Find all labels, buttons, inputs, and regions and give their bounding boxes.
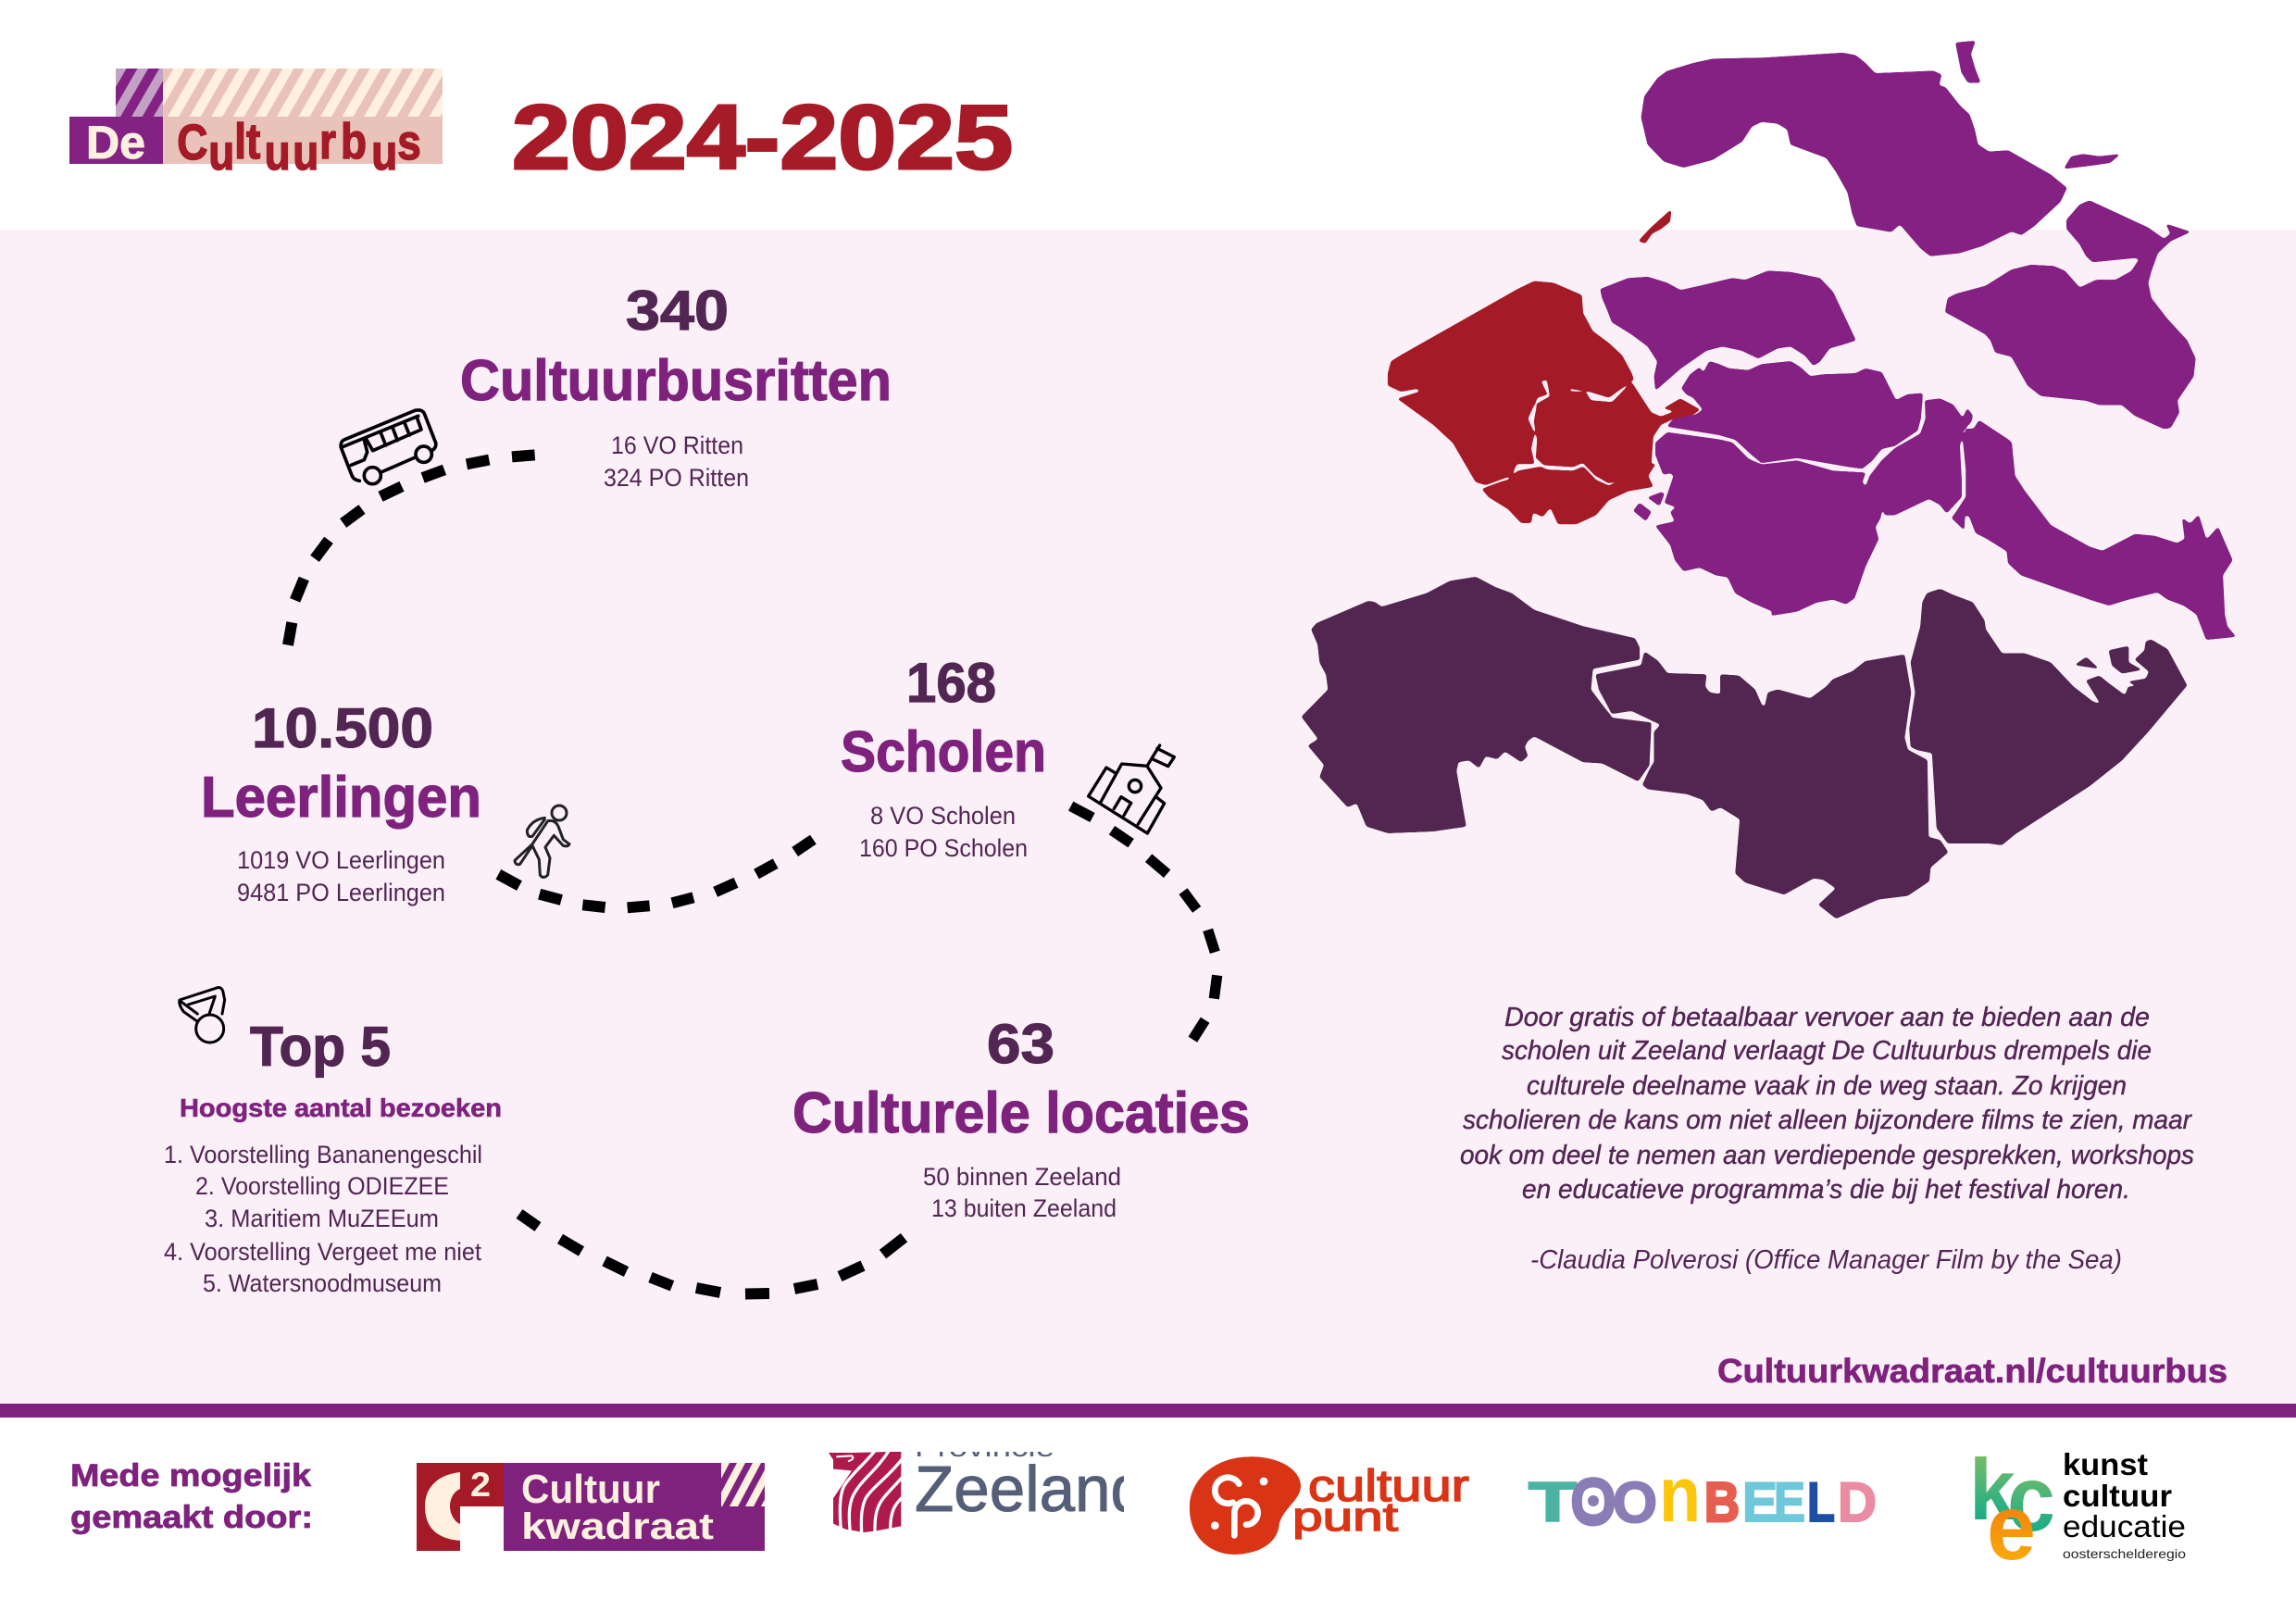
logo: Toonbeeld: O [1613,1471,1657,1535]
logo: Toonbeeld: E [1742,1471,1778,1533]
stat: Top 5 list: 1. Voorstelling Bananengeschil [164,1141,482,1168]
dashed route: pupils to schools [498,840,813,907]
logo: Cultuur kwadraat: Cultuur [521,1467,660,1512]
logo: De Cultuurbus: De [86,117,145,169]
logo: kunst cultuur educatie: c [2007,1447,2055,1551]
stat: 340 Cultuurbusritten: 16 VO Ritten [611,431,743,459]
logo: kunst cultuur educatie: cultuur [2063,1479,2172,1513]
stat: Top 5 list: Hoogste aantal bezoeken [180,1093,502,1122]
logo: De Cultuurbus: Cultuurbus [177,114,421,181]
stat: 340 Cultuurbusritten: Cultuurbusritten [460,349,892,413]
stat: Top 5 list: 5. Watersnoodmuseum [203,1269,442,1297]
stat: Top 5 list: 3. Maritiem MuZEEum [205,1205,439,1232]
stat: 63 Culturele locaties: 50 binnen Zeeland [923,1163,1121,1191]
map of Zeeland [1302,41,2236,918]
stat: 168 Scholen: 168 [906,652,996,714]
quote text block: culturele deelname vaak in de weg staan. Zo krijgen [1527,1071,2127,1101]
logo: Cultuurpunt [1190,1456,1469,1555]
logo: Provincie Zeeland: Zeeland [915,1453,1146,1525]
stat: 340 Cultuurbusritten: 324 PO Ritten [604,464,749,492]
stat: 340 Cultuurbusritten: 340 [626,280,729,342]
stat: 168 Scholen: 160 PO Scholen [859,834,1028,862]
dashed route: schools to locations [1071,806,1217,1040]
logo: Provincie Zeeland: Provincie [915,1432,1054,1463]
title: year: 2024-2025 [512,86,1013,188]
logo: kunst cultuur educatie: e [1987,1476,2036,1580]
stat: 63 Culturele locaties: 63 [987,1013,1054,1075]
stat: 168 Scholen: Scholen [841,720,1046,784]
footer divider bar [0,1404,2296,1418]
logo: Toonbeeld: L [1807,1471,1835,1533]
logo: kunst cultuur educatie: oosterschelderegio [2063,1546,2186,1561]
footer heading: gemaakt door: [70,1500,313,1535]
logo: Toonbeeld: B [1704,1471,1740,1533]
logo: Toonbeeld: E [1774,1471,1805,1533]
quote text block: ook om deel te nemen aan verdiepende gesprekken, workshops [1460,1141,2194,1170]
logo: Provincie Zeeland [829,1452,1124,1532]
website link: Cultuurkwadraat.nl/cultuurbus [1717,1352,2227,1390]
stat: 168 Scholen [841,652,1046,862]
stat: Top 5 list: Top 5 [250,1016,391,1078]
footer heading: Mede mogelijk [70,1458,311,1493]
stat: 10.500 Leerlingen [201,697,481,906]
panel: pink main area [0,230,2296,1404]
quote text block: -Claudia Polverosi (Office Manager Film by the Sea) [1530,1245,2122,1275]
logo: kunst cultuur educatie: educatie [2063,1509,2186,1543]
stat: 340 Cultuurbusritten [460,280,892,492]
stat: 10.500 Leerlingen: 1019 VO Leerlingen [237,846,445,874]
stat: 10.500 Leerlingen: Leerlingen [201,766,481,830]
stat: 63 Culturele locaties [792,1013,1250,1222]
dashed route: locations to top 5 [519,1214,904,1294]
logo: Cultuur kwadraat: 2 [470,1466,491,1504]
logo: Toonbeeld: T [1529,1471,1577,1533]
logo: Toonbeeld: n [1659,1451,1701,1538]
logo: Cultuur kwadraat: kwadraat [521,1506,714,1547]
stat: 10.500 Leerlingen: 10.500 [252,697,433,759]
quote text block: scholieren de kans om niet alleen bijzondere films te zien, maar [1463,1106,2192,1135]
logo: Toonbeeld: D [1838,1471,1877,1533]
stat: 10.500 Leerlingen: 9481 PO Leerlingen [237,879,445,906]
logo: kunst cultuur educatie: kunst [2063,1447,2148,1481]
stat: 63 Culturele locaties: Culturele locaties [792,1081,1250,1145]
map: Oosterschelde islands [1601,41,2236,640]
icon: school [1089,745,1174,833]
stat: Top 5 list [164,1016,502,1297]
stat: 63 Culturele locaties: 13 buiten Zeeland [931,1194,1117,1222]
map: Zeeuws-Vlaanderen in dark purple [1302,577,2187,918]
logo: Toonbeeld [1529,1451,1877,1540]
stat: Top 5 list: 4. Voorstelling Vergeet me niet [164,1238,481,1266]
footer heading [70,1458,313,1535]
icon: medal [180,987,225,1043]
map: Walcheren in red [1388,209,1700,524]
icon: bus [341,410,436,484]
quote text block: en educatieve programma’s die bij het festival horen. [1522,1175,2130,1205]
quote text block: Door gratis of betaalbaar vervoer aan te bieden aan de [1504,1003,2150,1032]
stat: 168 Scholen: 8 VO Scholen [870,802,1016,830]
logo: De Cultuurbus [69,69,443,181]
logo: Cultuurpunt: punt [1292,1494,1398,1540]
icon: walking student [515,806,569,877]
quote text block: scholen uit Zeeland verlaagt De Cultuurbus drempels die [1502,1036,2152,1066]
logo: Cultuur kwadraat [417,1463,765,1551]
logo: Cultuurpunt: cultuur [1308,1462,1469,1511]
stat: Top 5 list: 2. Voorstelling ODIEZEE [195,1172,449,1200]
logo: kunst cultuur educatie [1969,1441,2186,1580]
logo: Toonbeeld: O [1570,1466,1616,1540]
quote text block [1460,1003,2194,1275]
dashed route: bus to pupils [288,455,535,645]
logo: kunst cultuur educatie: k [1969,1441,2016,1538]
